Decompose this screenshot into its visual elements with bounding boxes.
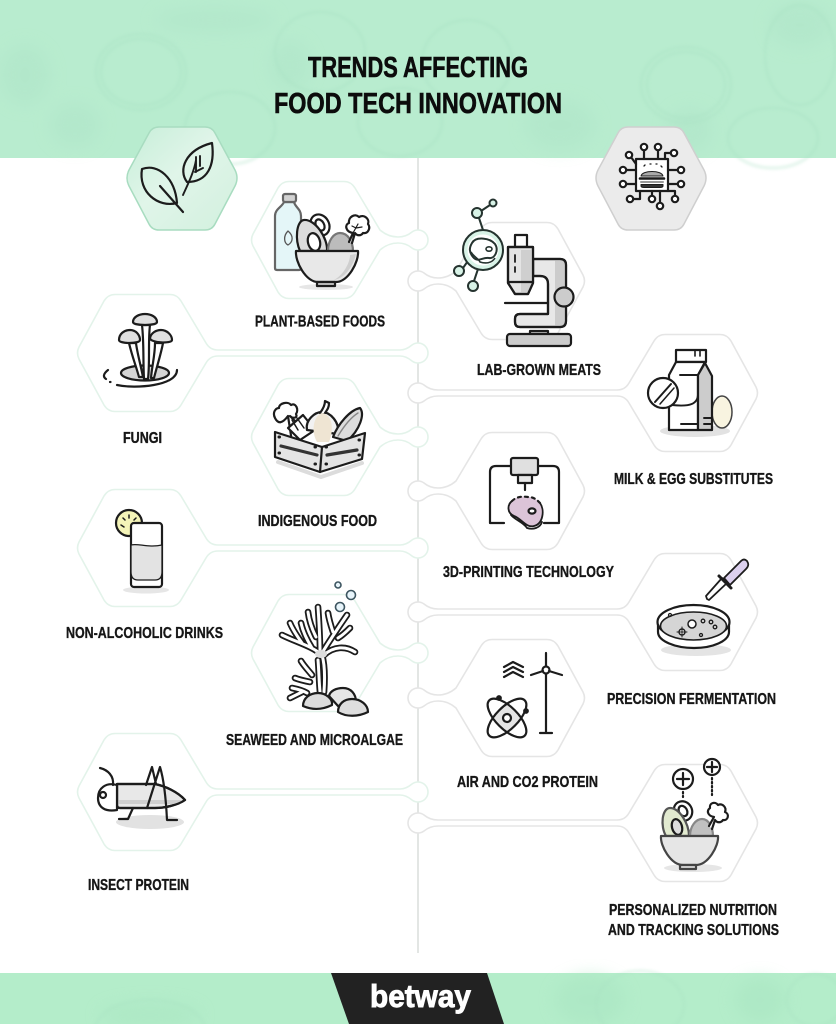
logo: betway xyxy=(331,973,504,1024)
icon: mushrooms xyxy=(104,314,177,387)
hexagon and connector xyxy=(408,222,584,340)
icon: microscope and molecule xyxy=(454,200,574,346)
label: SEAWEED AND MICROALGAE xyxy=(226,732,403,749)
panel: milk and egg substitutes xyxy=(408,334,773,488)
hexagon and connector xyxy=(408,554,758,670)
header band xyxy=(0,0,836,168)
label: FUNGI xyxy=(123,430,162,447)
hexagon and connector xyxy=(252,182,428,298)
title: FOOD TECH INNOVATION xyxy=(274,88,562,120)
panel: non-alcoholic drinks xyxy=(66,490,428,642)
icon: bottle and bowl xyxy=(275,194,369,290)
icon: bowl with plus signs xyxy=(661,759,728,872)
panel: air and CO2 protein xyxy=(408,640,598,791)
icon: leaves hexagon xyxy=(127,127,237,230)
panel: lab-grown meats xyxy=(408,200,601,379)
label: AIR AND CO2 PROTEIN xyxy=(457,774,598,791)
hexagon and connector xyxy=(78,294,428,412)
icon: food chip hexagon xyxy=(596,127,706,230)
footer band xyxy=(0,971,836,1024)
panel: indigenous food xyxy=(252,378,428,530)
panel: seaweed and microalgae xyxy=(226,582,428,749)
icon: petri dish and dropper xyxy=(658,560,748,656)
icon: 3D printer and meat xyxy=(490,458,559,529)
icon: crate of vegetables xyxy=(274,401,365,477)
vertical timeline line xyxy=(417,158,419,953)
label: 3D-PRINTING TECHNOLOGY xyxy=(443,564,615,581)
logo: betway: betway xyxy=(370,978,471,1014)
icon: cricket xyxy=(98,767,185,829)
icon: wind turbine and atom xyxy=(482,653,562,743)
hexagon and connector xyxy=(408,334,758,452)
hexagon and connector xyxy=(78,490,428,606)
hexagon and connector xyxy=(252,378,428,496)
icon: milk carton and egg xyxy=(648,350,732,437)
label: PRECISION FERMENTATION xyxy=(607,691,776,708)
label: INDIGENOUS FOOD xyxy=(258,513,377,530)
icon: seaweed and rocks xyxy=(282,582,368,716)
label: MILK & EGG SUBSTITUTES xyxy=(614,471,773,488)
hexagon and connector xyxy=(408,432,584,550)
label: PLANT-BASED FOODS xyxy=(255,314,385,330)
panel: fungi xyxy=(78,294,428,447)
label: INSECT PROTEIN xyxy=(88,877,189,894)
label xyxy=(608,902,779,939)
label: AND TRACKING SOLUTIONS xyxy=(608,922,779,939)
label: PERSONALIZED NUTRITION xyxy=(609,902,777,919)
hexagon and connector xyxy=(408,764,758,882)
panel: 3D-printing technology xyxy=(408,432,615,581)
panel: plant-based foods xyxy=(252,182,428,330)
label: LAB-GROWN MEATS xyxy=(477,362,601,379)
hexagon and connector xyxy=(408,640,584,756)
icon: glass with lemon xyxy=(116,510,169,594)
title xyxy=(274,52,562,120)
panel: precision fermentation xyxy=(408,554,776,708)
panel: personalized nutrition and tracking solutions xyxy=(408,759,779,939)
hexagon and connector xyxy=(78,734,428,850)
panel: insect protein xyxy=(78,734,428,894)
label: NON-ALCOHOLIC DRINKS xyxy=(66,625,223,642)
hexagon and connector xyxy=(252,594,428,712)
title: TRENDS AFFECTING xyxy=(308,52,528,84)
